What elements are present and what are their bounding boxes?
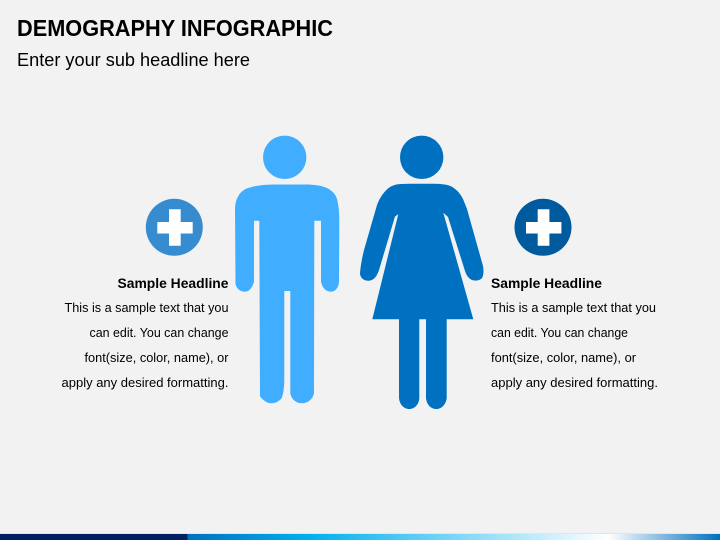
right body text: apply any desired formatting.	[491, 375, 658, 390]
icon: man figure	[235, 136, 339, 403]
left body text: font(size, color, name), or	[84, 350, 229, 365]
icon: woman figure	[360, 136, 483, 409]
right body text: This is a sample text that you	[491, 300, 656, 315]
left body text: apply any desired formatting.	[62, 375, 228, 390]
footer bar	[0, 533, 720, 540]
icon: right plus badge	[514, 199, 572, 256]
right body text	[491, 300, 658, 390]
title: DEMOGRAPHY INFOGRAPHIC	[17, 15, 333, 41]
left body text: can edit. You can change	[90, 325, 228, 340]
icon: left plus badge	[146, 199, 203, 256]
left body text: This is a sample text that you	[64, 300, 228, 315]
text block: right	[491, 276, 658, 390]
left headline: Sample Headline	[118, 276, 229, 291]
right body text: can edit. You can change	[491, 325, 628, 340]
right headline: Sample Headline	[491, 276, 602, 291]
left body text	[62, 300, 229, 390]
subtitle: Enter your sub headline here	[17, 50, 250, 70]
right body text: font(size, color, name), or	[491, 350, 637, 365]
text block: left	[62, 276, 229, 390]
